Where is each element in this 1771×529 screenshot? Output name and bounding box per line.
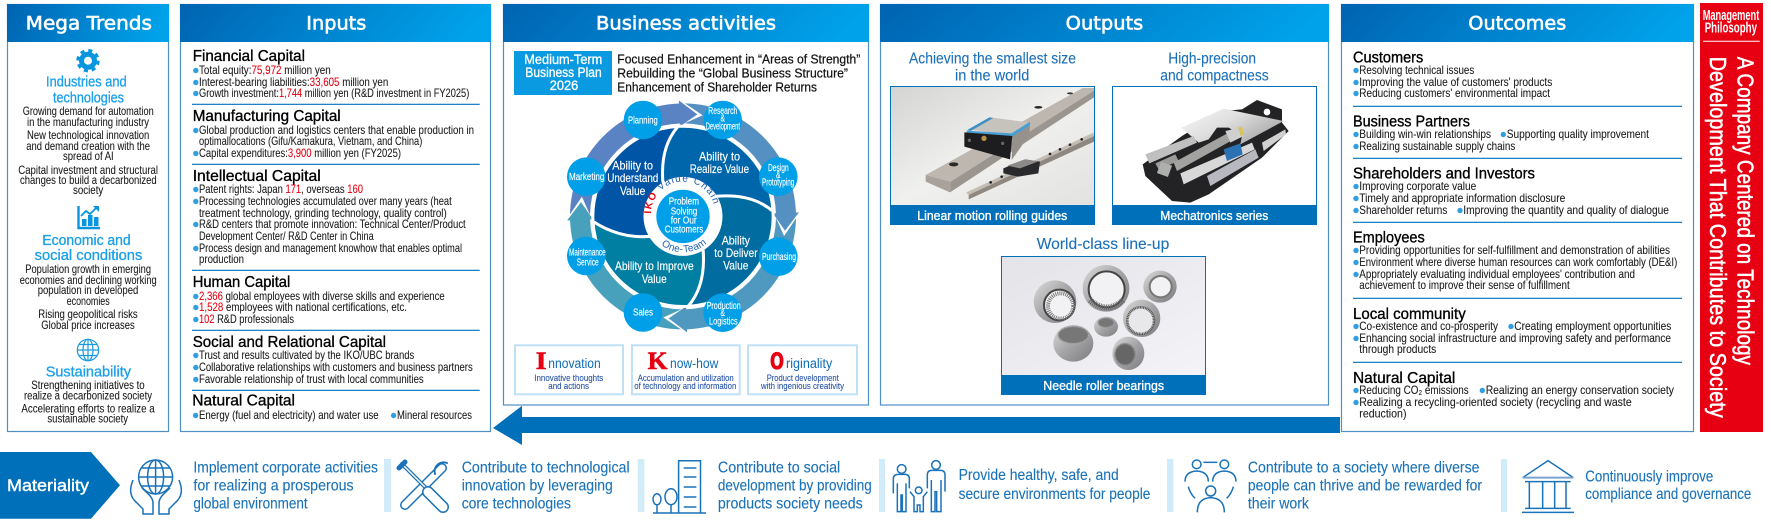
- banner: materiality: Materiality: [7, 476, 90, 495]
- hub: problem solving: One-Team: [662, 240, 706, 252]
- icon: tools: [398, 462, 447, 510]
- section: employees: Employees: [1353, 230, 1425, 247]
- box: medium-term business plan: [514, 51, 612, 95]
- section: local community: Creating employment opportunities: [1514, 319, 1671, 333]
- section: human capital: [193, 274, 445, 326]
- box: medium-term business plan: Medium-Term: [524, 52, 602, 67]
- subheading: industries and technologies: [46, 75, 127, 106]
- section: business partners: Realizing sustainable supply chains: [1359, 139, 1515, 153]
- text block: industries and technologies: New technological innovation: [27, 128, 149, 142]
- subheading: high precision: and compactness: [1160, 67, 1269, 84]
- text: global environment: for realizing a prosperous: [193, 478, 354, 495]
- quadrant labels: Ability to: [612, 158, 653, 172]
- hub: problem solving: Solving: [671, 205, 697, 217]
- text: global environment: Implement corporate activities: [193, 460, 378, 477]
- text: technological innovation: Contribute to technological: [462, 460, 630, 477]
- text block: economic and social conditions: [20, 262, 157, 332]
- section: manufacturing capital: [193, 108, 474, 160]
- node: purchasing: [759, 237, 798, 276]
- section: manufacturing capital: optimallocations (Gifu/Kamakura, Vietnam, and China): [199, 134, 422, 148]
- node: production and logistics: Production: [707, 300, 741, 312]
- section: natural capital: Mineral resources: [397, 408, 472, 422]
- text block: strategy: Enhancement of Shareholder Returns: [617, 80, 817, 94]
- card: originality: with ingenious creativity: [760, 381, 844, 392]
- section: social and relational capital: Social and Relational Capital: [193, 334, 386, 351]
- quadrant labels: Value: [642, 272, 667, 286]
- quadrant labels: Ability to Improve: [615, 259, 694, 273]
- caption: needle roller bearings: [1001, 376, 1206, 395]
- node: marketing: [567, 157, 606, 196]
- section: manufacturing capital: Capital expenditures:3,900 million yen (FY2025): [199, 146, 401, 160]
- text: social development: development by providing: [718, 478, 872, 495]
- panel: outputs: [880, 4, 1329, 405]
- node: production and logistics: &: [720, 307, 725, 319]
- text block: sustainability: realize a decarbonized society: [24, 388, 152, 402]
- text block: economic and social conditions: Global price increases: [41, 318, 135, 332]
- quadrant labels: to Deliver: [714, 246, 758, 260]
- panel: business activities: [502, 4, 870, 406]
- icon: chart: [78, 206, 100, 228]
- caption: linear motion rolling guides: [890, 206, 1095, 225]
- node: production and logistics: [703, 293, 742, 332]
- section: employees: achievement to improve their sense of fulfillment: [1359, 278, 1570, 292]
- quadrant labels: Ability to: [699, 149, 740, 163]
- text block: industries and technologies: spread of AI: [63, 149, 114, 163]
- materiality item: social development: [653, 460, 872, 513]
- subheading: economic and social conditions: Economic and: [42, 233, 131, 249]
- section: financial capital: [193, 48, 469, 100]
- node: marketing: Marketing: [569, 171, 604, 183]
- subheading: smallest size: in the world: [955, 67, 1029, 84]
- text block: sustainability: sustainable society: [47, 412, 128, 426]
- box: medium-term business plan: 2026: [550, 78, 578, 93]
- subheading: world-class line-up: World-class line-up: [1037, 236, 1169, 253]
- text: healthy and safe: secure environments for people: [959, 486, 1150, 503]
- text block: economic and social conditions: economies and declining working: [20, 273, 157, 287]
- photo: needle roller bearings: [1002, 256, 1206, 376]
- section: social and relational capital: [193, 334, 473, 386]
- section: employees: Appropriately evaluating individual employees' contribution and: [1359, 267, 1635, 281]
- icon: globe: [77, 339, 99, 361]
- text block: strategy: [617, 51, 860, 94]
- section: local community: Co-existence and co-prosperity: [1359, 319, 1498, 333]
- text: global environment: global environment: [193, 496, 308, 513]
- icon: family: [893, 461, 945, 512]
- hub: problem solving: [644, 176, 722, 256]
- node: production and logistics: Logistics: [709, 315, 738, 327]
- card: know-how: K: [648, 348, 668, 375]
- text block: economic and social conditions: economies: [67, 294, 110, 308]
- box: medium-term business plan: Business Plan: [525, 65, 602, 80]
- section: intellectual capital: Processing technologies accumulated over many years (heat: [199, 194, 452, 208]
- text block: sustainability: [21, 378, 155, 426]
- text: diverse people: Contribute to a society where diverse: [1248, 460, 1480, 477]
- section: financial capital: Financial Capital: [193, 48, 305, 65]
- quadrant labels: Ability: [722, 233, 750, 247]
- text: compliance and governance: [1585, 469, 1751, 503]
- section: natural capital outcomes: Reducing CO₂ emissions: [1359, 383, 1469, 397]
- heading: business activities: Business activities: [596, 12, 776, 34]
- materiality item: global environment: [131, 460, 378, 514]
- text: compliance and governance: Continuously improve: [1585, 469, 1713, 486]
- card: originality: O: [770, 350, 784, 375]
- node: design and prototyping: Design: [768, 162, 789, 174]
- subheading: industries and technologies: technologies: [53, 90, 124, 106]
- subheading: smallest size: Achieving the smallest size: [909, 50, 1076, 67]
- node: research and development: [703, 101, 742, 139]
- section: shareholders and investors: Improving corporate value: [1359, 179, 1477, 193]
- node: maintenance service: Maintenance: [569, 247, 606, 259]
- vertical statement line two: Development That Contributes to Society: [1705, 57, 1731, 418]
- section: shareholders and investors: Timely and appropriate information disclosure: [1359, 191, 1566, 205]
- section: intellectual capital: Patent rights: Japan 171, overseas 160: [199, 182, 363, 196]
- icon: gear: [78, 51, 98, 71]
- section: employees: [1353, 230, 1677, 292]
- text: technological innovation: innovation by leveraging: [462, 478, 613, 495]
- node: sales: [624, 293, 662, 332]
- section: intellectual capital: production: [199, 252, 244, 266]
- section: natural capital outcomes: Natural Capital: [1353, 370, 1455, 387]
- section: shareholders and investors: Improving the quantity and quality of dialogue: [1463, 203, 1669, 217]
- text: technological innovation: core technologies: [462, 496, 571, 513]
- materiality item: diverse people: [1185, 460, 1483, 513]
- panel: management philosophy: [1700, 3, 1763, 432]
- icon: people group: [1185, 460, 1236, 512]
- subheading: smallest size: [909, 50, 1076, 84]
- heading: outcomes: Outcomes: [1468, 12, 1566, 34]
- panel: mega trends: [7, 4, 169, 432]
- card: innovation: Innovative thoughts: [534, 373, 603, 384]
- text: diverse people: people can thrive and be rewarded for: [1248, 478, 1483, 495]
- icon: building and trees: [653, 461, 706, 513]
- node: research and development: Research: [708, 105, 737, 117]
- section: financial capital: Total equity:75,972 million yen: [199, 63, 331, 77]
- text block: sustainability: Accelerating efforts to realize a: [21, 402, 155, 416]
- photo: linear motion rolling guides: [890, 86, 1094, 206]
- section: intellectual capital: Process design and management knowhow that enables optimal: [199, 241, 462, 255]
- text block: strategy: Focused Enhancement in “Areas of Strength”: [617, 51, 860, 66]
- section: shareholders and investors: [1353, 166, 1669, 217]
- card: originality: [748, 345, 857, 394]
- caption: linear motion rolling guides: Linear motion rolling guides: [917, 208, 1068, 223]
- text: technological innovation: [462, 460, 630, 513]
- arrow: feedback to inputs: [493, 406, 1340, 445]
- materiality item: compliance and governance: [1522, 461, 1751, 512]
- text block: industries and technologies: society: [73, 183, 103, 197]
- section: natural capital outcomes: Realizing an energy conservation society: [1486, 383, 1674, 397]
- section: social and relational capital: Trust and results cultivated by the IKO/UBC brands: [199, 348, 414, 362]
- section: natural capital outcomes: Realizing a recycling-oriented society (recycling and waste: [1359, 395, 1632, 409]
- section: intellectual capital: Intellectual Capital: [193, 168, 321, 185]
- section: social and relational capital: Collaborative relationships with customers and business partners: [199, 360, 473, 374]
- section: local community: Enhancing social infrastructure and improving safety and performance: [1359, 331, 1671, 345]
- text block: industries and technologies: changes to build a decarbonized: [20, 173, 157, 187]
- chart: value chain cycle: [567, 100, 799, 332]
- text block: industries and technologies: [18, 104, 158, 197]
- section: employees: Environment where diverse human resources can work comfortably (DE&I): [1359, 255, 1677, 269]
- subheading: economic and social conditions: social conditions: [35, 248, 142, 264]
- node: design and prototyping: Prototyping: [762, 177, 794, 189]
- text block: industries and technologies: Growing demand for automation: [23, 104, 154, 118]
- card: innovation: nnovation: [548, 356, 601, 371]
- section: local community: Local community: [1353, 306, 1466, 323]
- card: know-how: Accumulation and utilization: [638, 373, 734, 384]
- section: natural capital: [192, 393, 472, 422]
- section: natural capital: Natural Capital: [192, 393, 295, 410]
- caption: mechatronics series: Mechatronics series: [1160, 208, 1269, 223]
- text block: industries and technologies: and demand creation with the: [26, 139, 150, 153]
- node: planning: [624, 101, 662, 139]
- quadrant labels: Understand: [607, 171, 658, 185]
- subheading: high precision: [1160, 50, 1269, 84]
- section: financial capital: Growth investment:1,744 million yen (R&D investment in FY2025): [199, 86, 469, 100]
- hub: problem solving: for Our: [671, 214, 697, 226]
- quadrant labels: Value: [723, 259, 749, 273]
- section: business partners: Supporting quality improvement: [1507, 127, 1650, 141]
- subheading: economic and social conditions: [35, 233, 142, 264]
- text: diverse people: [1248, 460, 1483, 513]
- card: originality: riginality: [786, 356, 833, 371]
- section: customers: Reducing customers' environmental impact: [1359, 86, 1551, 100]
- section: intellectual capital: treatment technology, grinding technology, quality control): [199, 206, 447, 220]
- card: know-how: of technology and information: [634, 381, 736, 392]
- node: research and development: &: [720, 112, 725, 124]
- section: customers: Customers: [1353, 50, 1423, 67]
- text block: strategy: Rebuilding the “Global Business Structure”: [617, 65, 848, 80]
- node: sales: Sales: [633, 307, 653, 319]
- hub: problem solving: Problem: [669, 195, 699, 207]
- section: natural capital outcomes: [1353, 370, 1674, 420]
- section: intellectual capital: R&D centers that promote innovation: Technical Center/Product: [199, 217, 466, 231]
- materiality item: healthy and safe: [893, 461, 1150, 512]
- text block: sustainability: Strengthening initiatives to: [31, 378, 145, 392]
- text: social development: Contribute to social: [718, 460, 840, 477]
- text block: economic and social conditions: Population growth in emerging: [25, 262, 151, 276]
- section: customers: [1353, 50, 1552, 100]
- text block: economic and social conditions: population in developed: [38, 283, 138, 297]
- photo: mechatronics series: [1112, 86, 1316, 206]
- quadrant labels: [607, 149, 758, 286]
- section: business partners: [1353, 114, 1650, 153]
- text: healthy and safe: [959, 467, 1150, 503]
- node: purchasing: Purchasing: [762, 251, 796, 263]
- panel: outcomes: [1341, 4, 1694, 432]
- quadrant labels: Realize Value: [690, 162, 749, 176]
- card: know-how: [632, 345, 740, 394]
- section: natural capital: Energy (fuel and electricity) and water use: [199, 408, 379, 422]
- section: social and relational capital: Favorable relationship of trust with local communities: [199, 372, 424, 386]
- text: social development: products society needs: [718, 496, 863, 513]
- heading: outputs: Outputs: [1066, 12, 1143, 34]
- card: innovation: and actions: [548, 381, 589, 392]
- icon: hands holding globe: [131, 460, 181, 514]
- card: know-how: now-how: [670, 356, 719, 371]
- card: innovation: [515, 345, 623, 394]
- section: customers: Improving the value of customers' products: [1359, 75, 1552, 89]
- inner value quadrants: [593, 126, 773, 307]
- section: manufacturing capital: Manufacturing Capital: [193, 108, 341, 125]
- node: design and prototyping: &: [776, 169, 780, 181]
- node: design and prototyping: [759, 157, 798, 196]
- heading: mega trends: Mega Trends: [26, 12, 152, 34]
- section: business partners: Business Partners: [1353, 114, 1470, 131]
- subheading: high precision: High-precision: [1168, 50, 1256, 67]
- text block: economic and social conditions: Rising geopolitical risks: [38, 307, 138, 321]
- section: employees: Providing opportunities for self-fulfillment and demonstration of abilities: [1359, 243, 1670, 257]
- card: originality: Product development: [767, 373, 839, 384]
- ring arrows: [567, 100, 799, 332]
- section: shareholders and investors: Shareholder returns: [1359, 203, 1447, 217]
- section: financial capital: Interest-bearing liabilities:33,605 million yen: [199, 75, 388, 89]
- node: maintenance service: Service: [577, 257, 599, 269]
- text: diverse people: their work: [1248, 496, 1310, 513]
- section: human capital: 102 R&D professionals: [199, 312, 294, 326]
- section: local community: through products: [1359, 342, 1436, 356]
- text: healthy and safe: Provide healthy, safe, and: [959, 467, 1119, 484]
- icon: temple: [1522, 461, 1574, 512]
- section: human capital: 1,528 employees with national certifications, etc.: [199, 300, 407, 314]
- subheading: industries and technologies: Industries and: [46, 75, 127, 91]
- section: intellectual capital: [193, 168, 466, 266]
- text: global environment: [193, 460, 378, 513]
- section: manufacturing capital: Global production and logistics centers that enable production in: [199, 123, 474, 137]
- section: local community: [1353, 306, 1671, 356]
- section: human capital: Human Capital: [193, 274, 290, 291]
- banner: materiality: [0, 452, 120, 519]
- materiality item: technological innovation: [398, 460, 630, 513]
- node: research and development: Development: [706, 120, 740, 132]
- node: maintenance service: [567, 237, 606, 275]
- section: human capital: 2,366 global employees with diverse skills and experience: [199, 289, 445, 303]
- hub: problem solving: IKO Value Chain: [644, 176, 718, 214]
- section: shareholders and investors: Shareholders and Investors: [1353, 166, 1535, 183]
- quadrant labels: Value: [620, 184, 646, 198]
- text block: industries and technologies: in the manufacturing industry: [27, 115, 149, 129]
- caption: needle roller bearings: Needle roller bearings: [1043, 378, 1164, 393]
- hub: problem solving: Customers: [665, 223, 703, 235]
- card: innovation: I: [536, 348, 547, 375]
- vertical statement line one: A Company Centered on Technology: [1732, 57, 1758, 365]
- section: intellectual capital: Development Center/ R&D Center in China: [199, 229, 374, 243]
- heading: inputs: Inputs: [306, 12, 366, 34]
- text: social development: [718, 460, 872, 513]
- panel: inputs: [180, 4, 491, 432]
- section: business partners: Building win-win relationships: [1359, 127, 1491, 141]
- text block: industries and technologies: Capital investment and structural: [18, 163, 158, 177]
- subheading: sustainability: Sustainability: [46, 365, 132, 381]
- section: customers: Resolving technical issues: [1359, 63, 1474, 77]
- caption: mechatronics series: [1112, 206, 1317, 225]
- section: natural capital outcomes: reduction): [1359, 406, 1406, 420]
- node: planning: Planning: [628, 114, 658, 126]
